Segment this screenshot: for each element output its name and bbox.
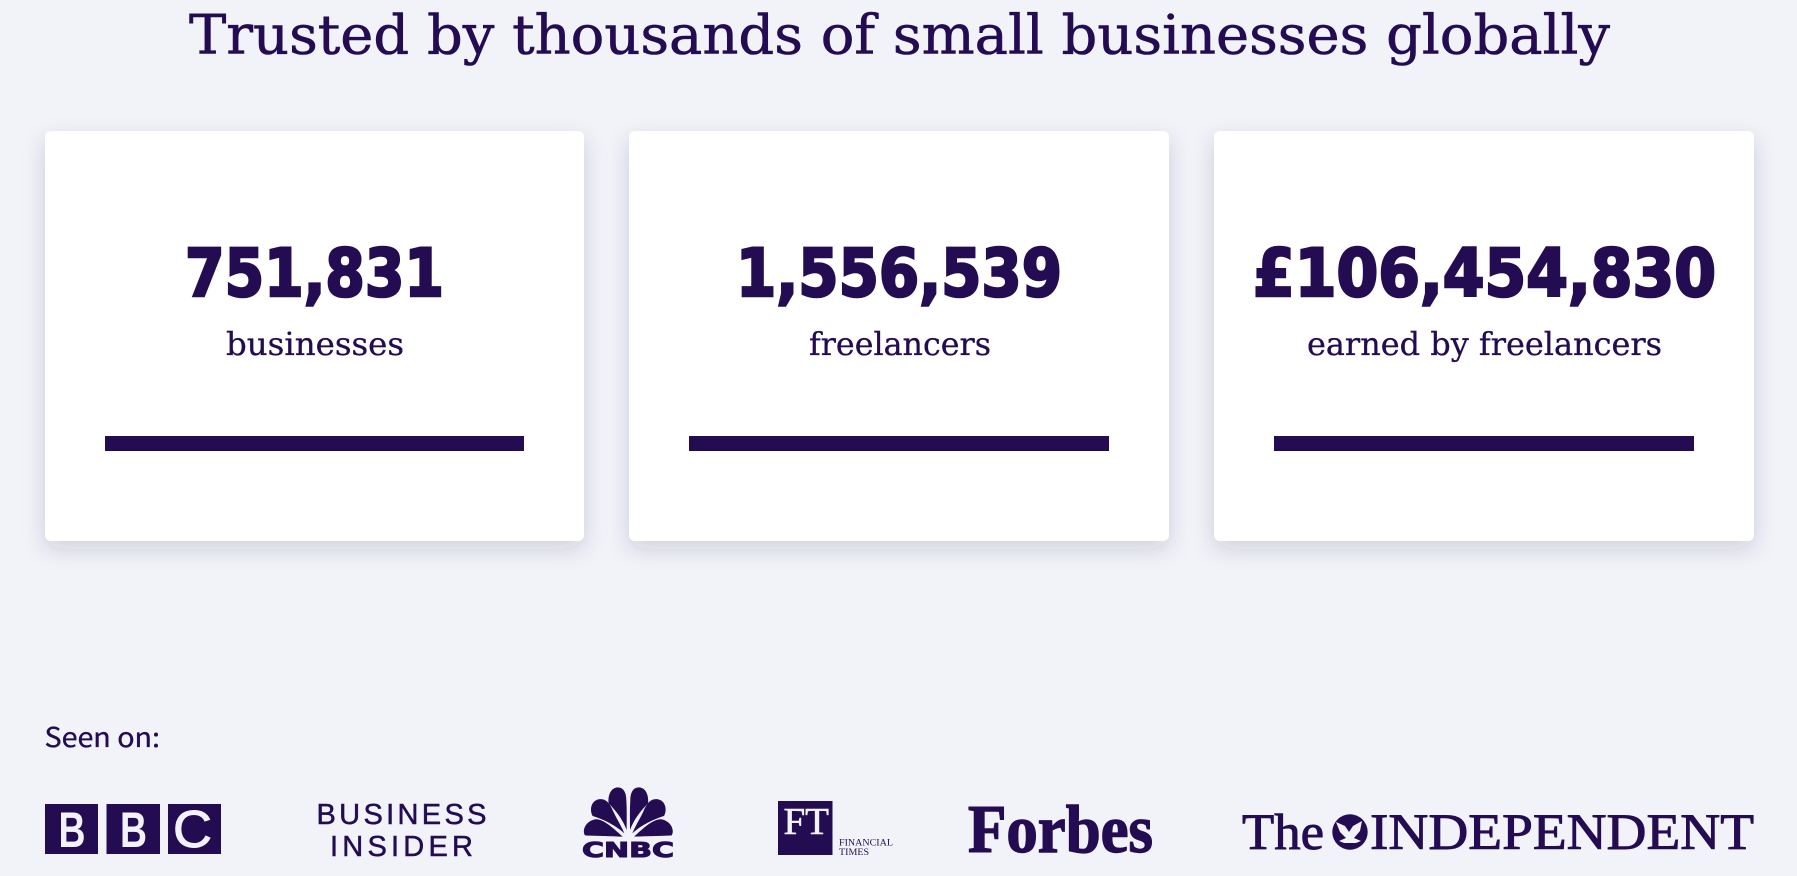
logo: BBC: B (58, 802, 86, 858)
logo: CNBC (582, 787, 674, 862)
logo: Financial Times: FINANCIAL (839, 838, 893, 848)
logo: Financial Times: FT (784, 801, 829, 843)
stat label: businesses: businesses (226, 325, 404, 363)
panel: businesses (45, 131, 584, 541)
logo: The Independent: INDEPENDENT (1370, 805, 1754, 861)
logo: Forbes: Forbes (968, 791, 1153, 867)
logo: BBC (45, 801, 221, 859)
logo: BBC: B (120, 802, 147, 858)
heading: seen on: Seen on: (44, 716, 160, 755)
logo: Business Insider: BUSINESS (316, 799, 486, 831)
stat number: earnings: £106,454,830 (1253, 235, 1716, 312)
stat label: freelancers: freelancers (809, 325, 991, 363)
stat number: freelancers: 1,556,539 (736, 235, 1062, 312)
logo: BBC: C (173, 801, 212, 859)
stat label: earnings: earned by freelancers (1307, 325, 1662, 363)
title: Trusted by thousands of small businesses globally (189, 4, 1611, 66)
panel: freelancers (629, 131, 1169, 541)
logo: Business Insider (316, 799, 486, 863)
panel: earned by freelancers (1214, 131, 1754, 541)
progress bar: earnings (1274, 436, 1694, 451)
logo: Business Insider: INSIDER (330, 831, 473, 863)
progress bar: businesses (105, 436, 524, 451)
logo: CNBC: CNBC (582, 838, 674, 862)
stat number: businesses: 751,831 (185, 235, 444, 312)
logo: Financial Times (778, 801, 893, 858)
progress bar: freelancers (689, 436, 1109, 451)
logo: The Independent: The (1242, 805, 1324, 861)
logo: Financial Times: TIMES (839, 848, 869, 858)
logo: The Independent (1242, 805, 1754, 861)
